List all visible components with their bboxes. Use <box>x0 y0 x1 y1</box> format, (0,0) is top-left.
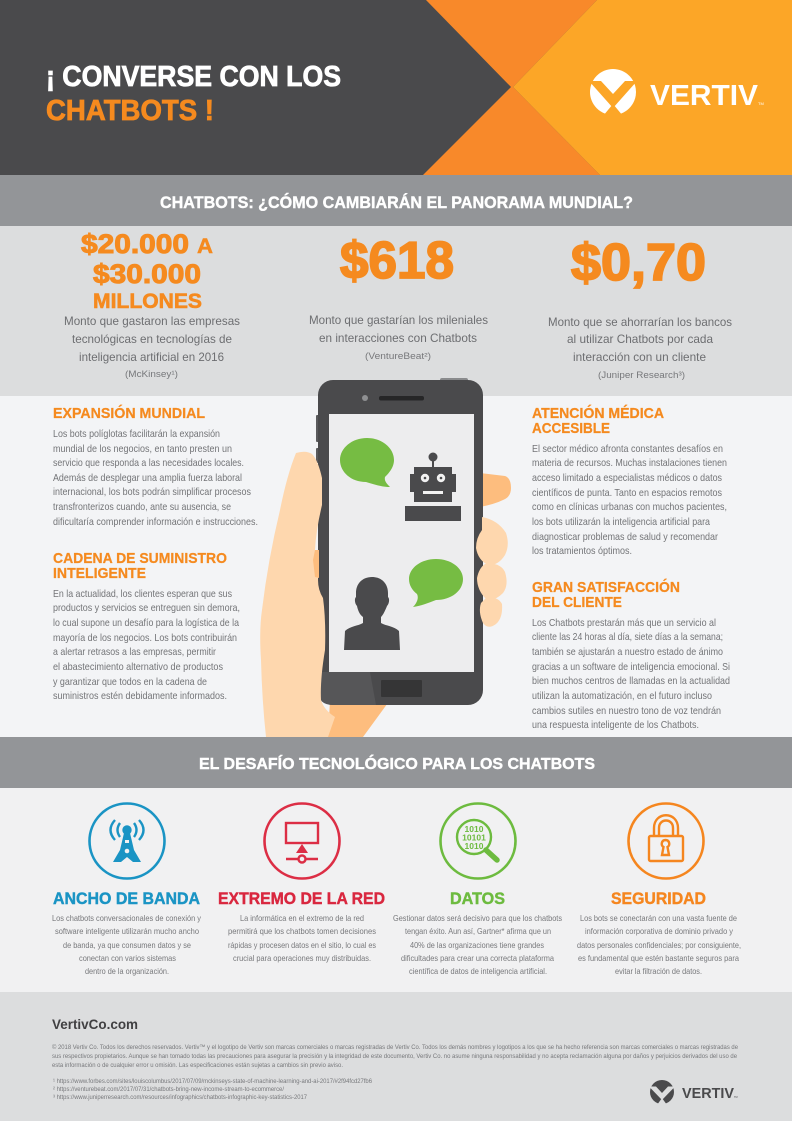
icon: magnifier with binary data: 1010 <box>465 824 484 834</box>
text block: cadena de suministro: a alertar retrasos a las empresas, permitir <box>53 646 216 658</box>
logo: Vertiv footer: VERTIV <box>682 1085 734 1102</box>
column: datos: Gestionar datos será decisivo para que los chatbots <box>393 913 562 923</box>
column: extremo de la red: rápidas y procesen datos en el sitio, lo cual es <box>228 940 376 950</box>
footnotes: ³ https://www.juniperresearch.com/resources/infographics/chatbots-infographic-key-statistics-2017 <box>53 1094 308 1101</box>
stat: McKinsey: $30.000 <box>93 259 201 289</box>
chat bubble: bot <box>340 438 394 487</box>
panel: footer <box>0 992 792 1121</box>
text block: expansión mundial: servicio que responda a las necesidades locales. <box>53 457 244 469</box>
column: extremo de la red: crucial para operaciones muy distribuidas. <box>233 953 371 963</box>
column: ancho de banda: Los chatbots conversacionales de conexión y <box>52 913 202 923</box>
stat: McKinsey: MILLONES <box>93 290 202 313</box>
column: ancho de banda: de banda, ya que consumen datos y se <box>63 940 191 950</box>
column: ancho de banda: conectan con varios sistemas <box>79 953 176 963</box>
logo: Vertiv footer: TM <box>734 1096 738 1099</box>
text block: gran satisfacción <box>532 578 730 731</box>
panel: use cases <box>0 396 792 737</box>
stat: McKinsey: Monto que gastaron las empresas <box>64 314 240 328</box>
logo: Vertiv <box>589 69 764 116</box>
legal text: esta información o de cualquier error u omisión. Las especificaciones están sujetas a cambios sin previo aviso. <box>52 1062 343 1069</box>
title <box>46 61 341 127</box>
icon: antenna tower <box>90 804 164 878</box>
icon: magnifier with binary data <box>440 804 516 878</box>
footnotes: ¹ https://www.forbes.com/sites/louiscolumbus/2017/07/09/mckinseys-state-of-machine-learning-and-ai-2017/#2f94fcd27fb6 <box>53 1078 373 1085</box>
column: seguridad: Los bots se conectarán con una vasta fuente de <box>580 913 737 923</box>
text block: atención médica: científicos de punta. Tanto en espacios remotos <box>532 487 722 499</box>
panel: technology challenges <box>0 737 792 992</box>
logo: Vertiv: VERTIV <box>650 80 759 112</box>
stat: McKinsey <box>64 229 240 379</box>
column: datos <box>393 804 562 976</box>
text block: expansión mundial: internacional, los bots podrán simplificar procesos <box>53 486 251 498</box>
stat: Juniper Research: Monto que se ahorrarían los bancos <box>548 315 732 329</box>
icon: padlock <box>628 804 704 878</box>
logo: Vertiv: TM <box>758 101 764 106</box>
text block: expansión mundial: mundial de los negocios, en tanto presten un <box>53 443 232 455</box>
column: ancho de banda: software inteligente utilizarán mucho ancho <box>55 926 199 936</box>
text block: gran satisfacción: cliente las 24 horas al día, siete días a la semana; <box>532 631 723 643</box>
text block: cadena de suministro: lo cual supone un desafío para la logística de la <box>53 617 239 629</box>
stat: McKinsey: (McKinsey¹) <box>125 369 178 379</box>
stat: McKinsey: A <box>197 235 213 258</box>
icon: person <box>344 577 400 650</box>
chat bubble: user <box>409 559 463 607</box>
column: extremo de la red: permitirá que los chatbots tomen decisiones <box>228 926 376 936</box>
text block: atención médica: ACCESIBLE <box>532 420 610 437</box>
text block: cadena de suministro: mayoría de los negocios. Los bots contribuirán <box>53 632 237 644</box>
legal text <box>52 1044 739 1069</box>
text block: cadena de suministro <box>53 550 240 702</box>
text block: expansión mundial <box>53 404 258 528</box>
icon: magnifier with binary data: 10101 <box>462 832 486 842</box>
text block: atención médica: como en clínicas urbanas con muchos pacientes, <box>532 501 727 513</box>
hand: wrist shadow <box>328 700 390 737</box>
text block: expansión mundial: transfronterizos cuando, ante su ausencia, se <box>53 501 231 513</box>
text block: atención médica: ATENCIÓN MÉDICA <box>532 404 664 422</box>
column: extremo de la red <box>218 804 385 963</box>
column: seguridad: SEGURIDAD <box>611 889 706 908</box>
column: datos: DATOS <box>450 889 505 908</box>
text block: cadena de suministro: y garantizar que todos en la cadena de <box>53 676 207 688</box>
hand: front fingers <box>476 517 508 627</box>
stat: VentureBeat: en interacciones con Chatbots <box>319 331 477 345</box>
text block: atención médica: los bots utilizarán la inteligencia artificial para <box>532 516 710 528</box>
column: ancho de banda: ANCHO DE BANDA <box>53 889 200 908</box>
logo: Vertiv footer <box>649 1080 738 1105</box>
heading: technology challenges: EL DESAFÍO TECNOLÓGICO PARA LOS CHATBOTS <box>199 754 595 773</box>
stat: VentureBeat: (VentureBeat²) <box>365 351 431 361</box>
text block: cadena de suministro: productos y servicios se entreguen sin demora, <box>53 602 240 614</box>
column: seguridad: datos personales confidenciales; por consiguiente, <box>577 940 741 950</box>
hand: palm and thumb <box>260 452 335 737</box>
text block: expansión mundial: Además de desplegar una amplia fuerza laboral <box>53 472 242 484</box>
text block: atención médica: diagnosticar problemas de salud y recomendar <box>532 531 718 543</box>
text block: cadena de suministro: INTELIGENTE <box>53 565 146 582</box>
text block: gran satisfacción: bien muchos centros de llamadas en la actualidad <box>532 675 730 687</box>
stat: Juniper Research: al utilizar Chatbots por cada <box>567 332 713 346</box>
text block: gran satisfacción: cambios sutiles en nuestro tono de voz tendrán <box>532 705 721 717</box>
stat: VentureBeat: $618 <box>340 232 454 290</box>
column: extremo de la red: La informática en el extremo de la red <box>240 913 364 923</box>
panel: global impact statistics <box>0 175 792 396</box>
icon: robot <box>405 452 461 521</box>
text block: gran satisfacción: utilizan la automatización, en el futuro incluso <box>532 690 712 702</box>
phone <box>316 378 483 705</box>
text block: atención médica: acceso limitado a especialistas médicos o datos <box>532 472 722 484</box>
column: ancho de banda <box>52 804 202 976</box>
text block: gran satisfacción: Los Chatbots prestarán más que un servicio al <box>532 617 716 629</box>
column: extremo de la red: EXTREMO DE LA RED <box>218 889 385 908</box>
stat: McKinsey: $20.000 <box>81 229 189 259</box>
heading: global impact: CHATBOTS: ¿CÓMO CAMBIARÁN EL PANORAMA MUNDIAL? <box>160 193 633 212</box>
text block: expansión mundial: dificultaría comprender información e instrucciones. <box>53 516 258 528</box>
text block: gran satisfacción: DEL CLIENTE <box>532 594 622 611</box>
panel: header <box>0 0 792 175</box>
column: seguridad: información corporativa de dominio privado y <box>585 926 734 936</box>
text block: cadena de suministro: suministros estén debidamente informados. <box>53 690 227 702</box>
legal text: sus respectivos propietarios. Aunque se han tomado todas las precauciones para asegurar la precisión y la integridad de este documento, Vertiv Co. no asume ninguna responsabilidad y no acepta reclamación alguna por daños y perjuicios derivados del uso de <box>52 1053 738 1060</box>
text block: gran satisfacción: también se ajustarán a nuestro estado de ánimo <box>532 646 723 658</box>
icon: magnifier with binary data: 1010 <box>465 841 484 851</box>
text block: expansión mundial: Los bots políglotas facilitarán la expansión <box>53 428 220 440</box>
text block: gran satisfacción: una respuesta inteligente de los Chatbots. <box>532 719 699 731</box>
text block: gran satisfacción: GRAN SATISFACCIÓN <box>532 578 680 596</box>
text block: atención médica: El sector médico afronta constantes desafíos en <box>532 443 723 455</box>
website link: VertivCo.com <box>52 1017 138 1032</box>
text block: atención médica: los tratamientos óptimos. <box>532 545 632 557</box>
hand: back finger <box>480 473 511 507</box>
title: CHATBOTS ! <box>46 95 214 127</box>
text block: cadena de suministro: CADENA DE SUMINISTRO <box>53 550 227 567</box>
footnotes: ² https://venturebeat.com/2017/07/31/chatbots-bring-new-income-stream-to-ecommerce/ <box>53 1086 284 1093</box>
stat: VentureBeat: Monto que gastarían los mileniales <box>309 313 488 327</box>
column: datos: dificultades para crear una correcta plataforma <box>401 953 554 963</box>
legal text: © 2018 Vertiv Co. Todos los derechos reservados. Vertiv™ y el logotipo de Vertiv son marcas comerciales o marcas registradas de Vertiv Co. Todos los demás nombres y logotipos a los que se ha hecho referencia son marcas comerciales o marcas registradas de <box>52 1044 739 1051</box>
stat: Juniper Research: $0,70 <box>571 234 706 292</box>
text block: gran satisfacción: gracias a un software de inteligencia emocional. Si <box>532 661 730 673</box>
column: seguridad: evitar la filtración de datos. <box>615 966 702 976</box>
stat: VentureBeat <box>309 232 488 361</box>
column: datos: tengan éxito. Aun así, Gartner* afirma que un <box>405 926 551 936</box>
text block: expansión mundial: EXPANSIÓN MUNDIAL <box>53 404 205 422</box>
illustration: hand holding phone <box>260 378 511 737</box>
stat: McKinsey: inteligencia artificial en 2016 <box>79 350 224 364</box>
title: ¡ CONVERSE CON LOS <box>46 61 341 93</box>
text block: cadena de suministro: el abastecimiento alternativo de productos <box>53 661 223 673</box>
stat: Juniper Research: interacción con un cliente <box>573 350 706 364</box>
column: seguridad <box>577 804 741 976</box>
column: datos: 40% de las organizaciones tiene grandes <box>410 940 544 950</box>
text block: cadena de suministro: En la actualidad, los clientes esperan que sus <box>53 588 232 600</box>
hand: thumb shadow <box>313 550 319 578</box>
icon: network monitor <box>264 804 340 878</box>
stat: Juniper Research: (Juniper Research³) <box>598 370 685 380</box>
text block: atención médica: materia de recursos. Muchas instalaciones tienen <box>532 457 727 469</box>
stat: Juniper Research <box>548 234 732 380</box>
stat: McKinsey: tecnológicas en tecnologías de <box>72 332 232 346</box>
footnotes <box>53 1078 373 1101</box>
column: ancho de banda: dentro de la organización. <box>85 966 169 976</box>
column: seguridad: es fundamental que estén bastante seguros para <box>578 953 739 963</box>
column: datos: científica de datos de inteligencia artificial. <box>409 966 547 976</box>
text block: atención médica <box>532 404 727 557</box>
